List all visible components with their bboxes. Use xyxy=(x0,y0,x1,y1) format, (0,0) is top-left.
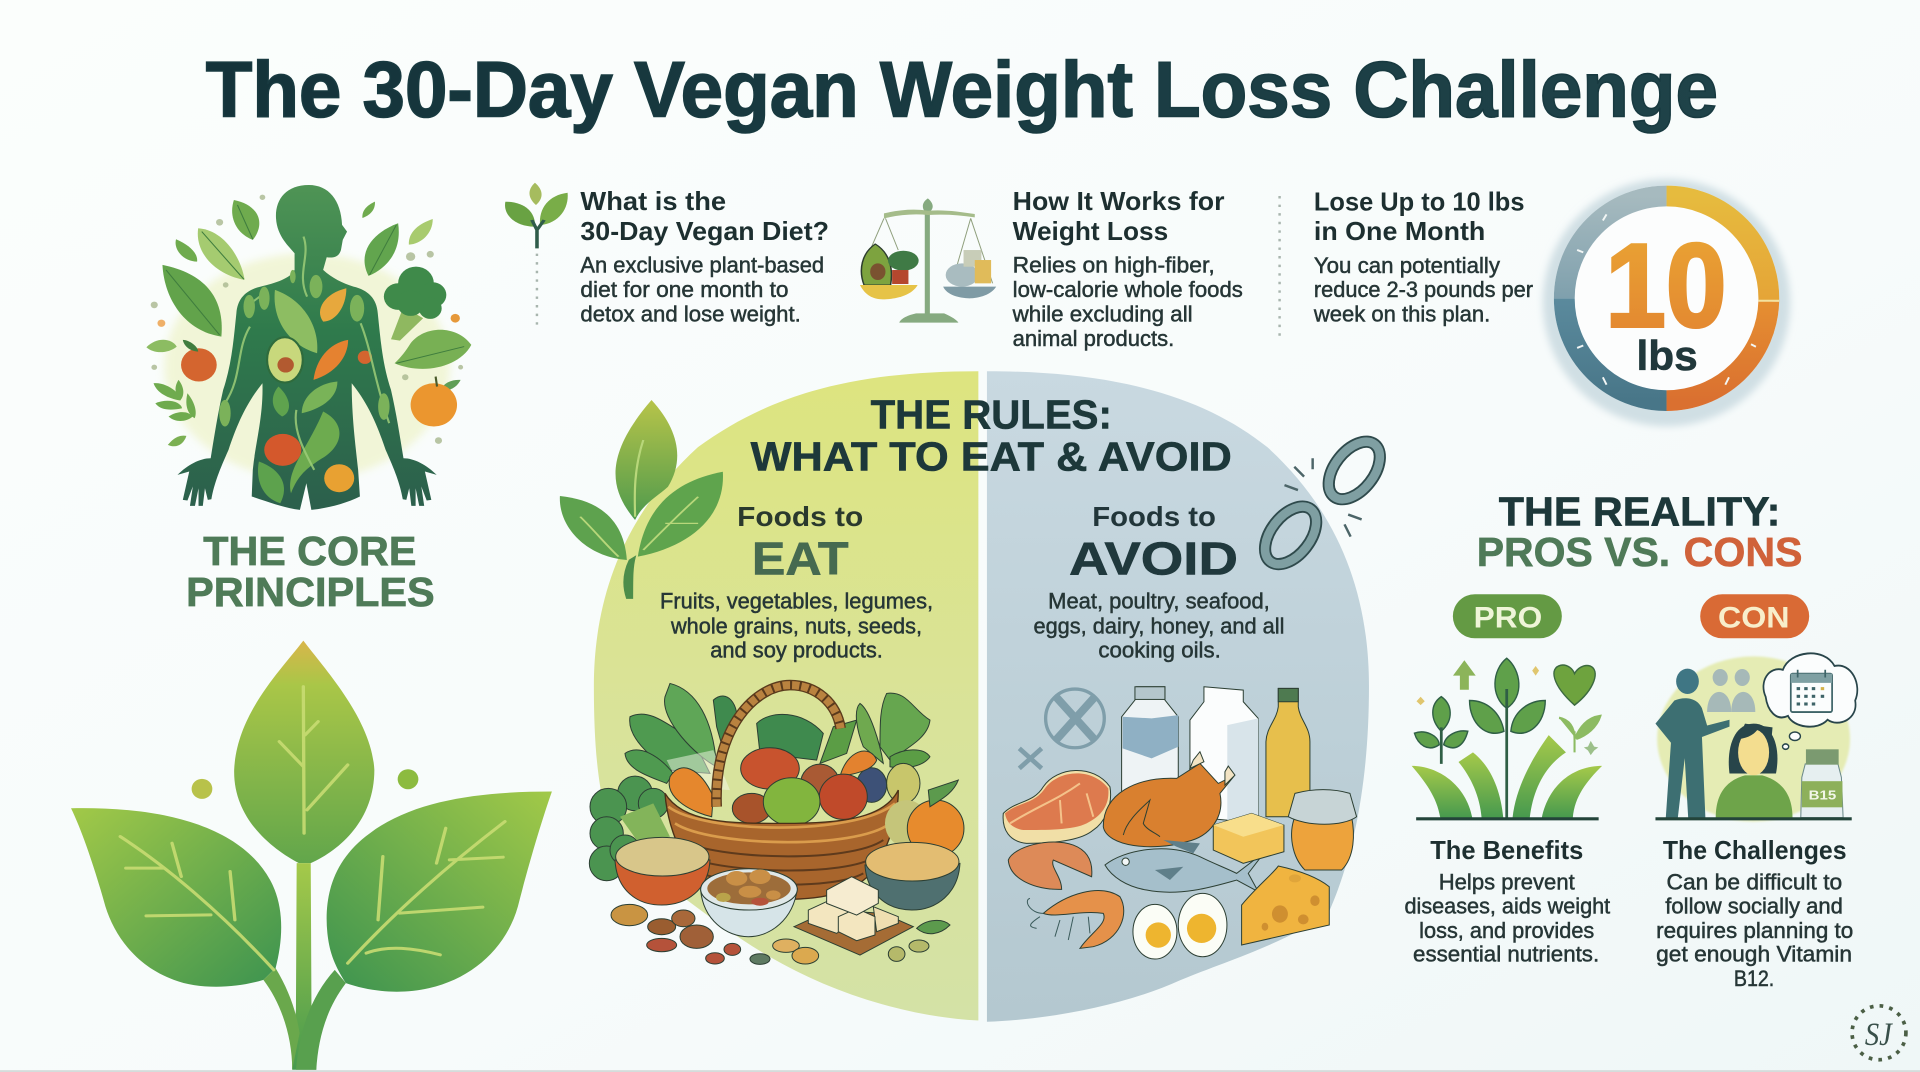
icon: balance scale xyxy=(860,198,996,323)
bowl of nuts xyxy=(701,888,797,937)
silhouette xyxy=(177,185,437,510)
text: how it works xyxy=(1012,186,1243,351)
heading: the rules xyxy=(751,391,1232,479)
tofu cubes xyxy=(794,910,913,955)
heading: the rules: THE RULES: xyxy=(871,391,1112,437)
divider dots xyxy=(536,254,538,326)
text: how it works: How It Works for xyxy=(1013,186,1224,216)
text: the benefits: essential nutrients. xyxy=(1413,942,1599,967)
icon: challenges people and planning: B15 xyxy=(1809,788,1836,803)
icon: broken chain xyxy=(1255,432,1390,574)
shrimp xyxy=(1043,891,1124,948)
panel: how it works for weight loss xyxy=(860,186,1280,351)
divider dots xyxy=(1279,196,1281,336)
panel: the rules plate xyxy=(560,371,1390,1022)
illustration: animal products to avoid xyxy=(1003,687,1357,959)
icon: large three-leaf plant xyxy=(71,641,552,1070)
text: lose up to 10 lbs xyxy=(1313,187,1533,327)
icon: sprout xyxy=(505,183,568,248)
subheading: foods to avoid xyxy=(1069,501,1238,584)
small sparkles xyxy=(1416,666,1539,705)
heading: the reality: PROS VS. xyxy=(1477,529,1670,575)
text: how it works: Relies on high-fiber, xyxy=(1013,253,1215,278)
plate: blue half xyxy=(987,371,1369,1022)
text: foods to eat list: Fruits, vegetables, legumes, xyxy=(660,588,933,613)
milk bottle xyxy=(1122,687,1178,803)
bottom edge line xyxy=(0,1070,1920,1072)
text: what is the diet: diet for one month to xyxy=(580,277,789,302)
panel: the core principles xyxy=(71,185,552,1070)
milk carton xyxy=(1190,687,1258,820)
panel: the reality pros vs cons xyxy=(1404,489,1857,991)
badge: con: CON xyxy=(1718,601,1790,634)
subheading: foods to eat xyxy=(737,501,863,584)
text: the benefits: The Benefits xyxy=(1430,837,1583,865)
badge: con xyxy=(1700,594,1809,638)
text: how it works: low-calorie whole foods xyxy=(1013,277,1243,302)
orange xyxy=(885,800,928,847)
badge: pro xyxy=(1453,594,1562,638)
surrounding leaves xyxy=(146,200,471,446)
value: 10: 10 xyxy=(1605,220,1727,353)
text: what is the diet: An exclusive plant-based xyxy=(580,253,824,278)
text: lose up to 10 lbs: week on this plan. xyxy=(1313,302,1490,327)
panel: what is the 30-day vegan diet xyxy=(505,183,829,327)
text: the benefits xyxy=(1404,837,1610,967)
heading: the reality: THE REALITY: xyxy=(1499,489,1780,535)
subheading: foods to avoid: Foods to xyxy=(1092,501,1216,532)
text: the benefits: Helps prevent xyxy=(1439,869,1575,894)
vitamin bottle xyxy=(1801,764,1843,818)
cheese wedge xyxy=(1242,866,1329,945)
text: the benefits: loss, and provides xyxy=(1419,918,1594,943)
logo: SJ monogram wreath xyxy=(1852,1006,1906,1060)
text: lose up to 10 lbs: You can potentially xyxy=(1314,253,1500,278)
icon: benefits plants xyxy=(1412,658,1602,819)
apples xyxy=(181,348,217,382)
subheading: foods to eat: Foods to xyxy=(737,501,863,532)
text: lose up to 10 lbs: in One Month xyxy=(1314,216,1485,246)
text: foods to avoid list xyxy=(1033,588,1284,662)
text: the challenges: Can be difficult to xyxy=(1667,869,1842,894)
text: foods to avoid list: Meat, poultry, seafood, xyxy=(1048,588,1270,613)
specks xyxy=(151,195,463,444)
badge: pro: PRO xyxy=(1474,601,1542,634)
text: lose up to 10 lbs: reduce 2-3 pounds per xyxy=(1314,277,1533,302)
text: foods to eat list xyxy=(660,588,933,662)
text: what is the diet: 30-Day Vegan Diet? xyxy=(580,216,829,246)
text: lose up to 10 lbs: Lose Up to 10 lbs xyxy=(1314,187,1524,217)
salmon steak xyxy=(1008,842,1092,889)
basket handle xyxy=(716,685,841,807)
subheading: foods to avoid: AVOID xyxy=(1069,532,1238,584)
text: foods to avoid list: cooking oils. xyxy=(1098,637,1221,662)
text: the challenges: The Challenges xyxy=(1663,837,1847,865)
text: how it works: Weight Loss xyxy=(1013,216,1168,246)
bowl of grains xyxy=(615,860,710,905)
fish xyxy=(1105,849,1265,892)
fruits and vegetables xyxy=(669,748,920,826)
text: what is the diet: What is the xyxy=(580,186,726,216)
heading: the reality xyxy=(1477,489,1802,575)
honey jar xyxy=(1292,817,1353,870)
oil bottle xyxy=(1266,688,1310,817)
title: The 30-Day Vegan Weight Loss Challenge xyxy=(206,45,1718,133)
text: foods to avoid list: eggs, dairy, honey, and all xyxy=(1033,613,1284,638)
text: the challenges: requires planning to xyxy=(1656,918,1853,943)
icon: human body filled with plants xyxy=(146,185,471,510)
butter block xyxy=(1213,813,1284,863)
icon: challenges people and planning xyxy=(1655,653,1857,822)
woman xyxy=(1729,724,1777,774)
heading: the rules: WHAT TO EAT & AVOID xyxy=(751,433,1232,479)
chart: 10 lbs progress ring xyxy=(1543,179,1790,426)
heading: the core principles: PRINCIPLES xyxy=(186,569,435,615)
panel: lose up to 10 lbs xyxy=(1313,179,1790,426)
scattered nuts and leaf xyxy=(611,904,950,964)
basket body xyxy=(665,790,898,899)
text: foods to eat list: whole grains, nuts, seeds, xyxy=(670,613,922,638)
text: the challenges: B12. xyxy=(1734,966,1774,991)
text: the challenges xyxy=(1656,837,1853,991)
icon: crossed circle xyxy=(1019,689,1104,768)
text: the challenges: follow socially and xyxy=(1665,894,1843,919)
subheading: foods to eat: EAT xyxy=(752,532,849,584)
text: how it works: while excluding all xyxy=(1012,302,1193,327)
steak xyxy=(1003,770,1111,843)
broccoli xyxy=(589,776,668,881)
text: foods to eat list: and soy products. xyxy=(710,637,883,662)
heading: the reality: CONS xyxy=(1684,529,1802,575)
boiled eggs xyxy=(1133,904,1177,959)
plate: yellow half xyxy=(594,371,978,1021)
greens xyxy=(625,683,930,783)
text: what is the diet xyxy=(580,186,829,327)
unit: lbs: lbs xyxy=(1637,332,1698,379)
broccoli xyxy=(384,267,446,341)
heading: the core principles: THE CORE xyxy=(203,528,416,574)
text: what is the diet: detox and lose weight. xyxy=(580,302,801,327)
text: how it works: animal products. xyxy=(1013,326,1174,351)
heading: the core principles xyxy=(186,528,435,615)
thought cloud with calendar xyxy=(1763,653,1857,727)
inner plants xyxy=(275,290,317,353)
bowl of chickpeas xyxy=(865,863,960,910)
standing man xyxy=(1676,669,1699,694)
illustration: basket of plant foods xyxy=(589,683,964,964)
logo: SJ monogram wreath: SJ xyxy=(1865,1017,1893,1053)
faded group xyxy=(1707,669,1755,712)
text: the benefits: diseases, aids weight xyxy=(1404,894,1610,919)
roast chicken xyxy=(1103,763,1235,847)
icon: leaf sprig xyxy=(560,400,723,598)
text: the challenges: get enough Vitamin xyxy=(1656,942,1852,967)
